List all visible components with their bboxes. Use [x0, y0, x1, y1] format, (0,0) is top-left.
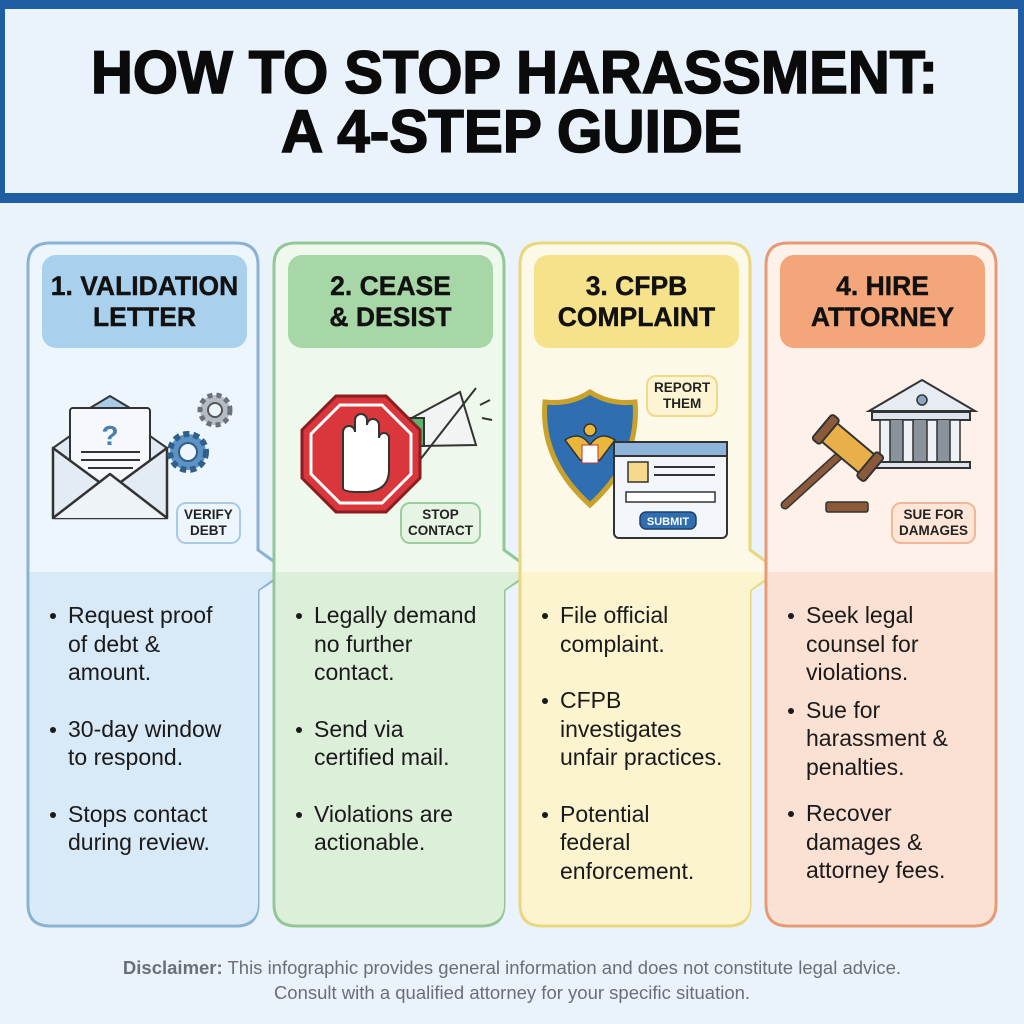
bullets: panel 3: enforcement.: [560, 858, 694, 884]
callout: report them: REPORT: [654, 380, 710, 395]
bullets: panel 2: Legally demand: [314, 602, 476, 628]
bullets: panel 2: no further: [314, 630, 412, 656]
panel 4 heading: ATTORNEY: [811, 302, 954, 332]
callout: stop contact: [400, 502, 481, 544]
panel 2 heading: [288, 255, 493, 348]
bullets: panel 2: actionable.: [314, 829, 425, 855]
bullets: panel 1: Request proof: [68, 602, 212, 628]
callout: verify debt: [176, 502, 241, 544]
title: A 4-STEP GUIDE: [281, 98, 742, 165]
panel 1 heading: LETTER: [93, 302, 196, 332]
panel 4 heading: [780, 255, 985, 348]
callout: sue for damages: SUE FOR: [904, 507, 964, 522]
callout: report them: [646, 375, 718, 417]
callout: stop contact: CONTACT: [408, 523, 473, 538]
disclaimer: Consult with a qualified attorney for your specific situation.: [274, 982, 750, 1003]
panel 4 heading: 4. HIRE: [836, 270, 929, 300]
bullets: panel 2: Violations are: [314, 800, 453, 826]
icon: stop sign with megaphone: [300, 387, 492, 514]
panel 3 heading: [534, 255, 739, 348]
title: [91, 39, 938, 165]
panel 2 heading: 2. CEASE: [330, 270, 451, 300]
bullets: panel 3: complaint.: [560, 630, 665, 656]
callout: sue for damages: DAMAGES: [899, 523, 968, 538]
panel 2 heading: & DESIST: [329, 302, 452, 332]
bullets: panel 4: [788, 602, 948, 883]
bullets: panel 3: federal: [560, 829, 630, 855]
panel 3 heading: COMPLAINT: [558, 302, 715, 332]
bullets: panel 2: certified mail.: [314, 744, 449, 770]
bullets: panel 3: unfair practices.: [560, 744, 722, 770]
callout: verify debt: VERIFY: [184, 507, 233, 522]
bullets: panel 1: of debt &: [68, 630, 160, 656]
bullets: panel 4: penalties.: [806, 754, 904, 780]
bullets: panel 3: investigates: [560, 716, 681, 742]
bullets: panel 1: to respond.: [68, 744, 183, 770]
disclaimer: Disclaimer: This infographic provides general information and does not constitute legal advice.: [123, 957, 901, 978]
bullets: panel 4: Seek legal: [806, 602, 913, 628]
bullets: panel 1: [50, 602, 222, 855]
bullets: panel 4: Recover: [806, 800, 892, 826]
bullets: panel 4: damages &: [806, 828, 922, 854]
bullets: panel 3: [542, 602, 722, 884]
bullets: panel 4: harassment &: [806, 725, 948, 751]
bullets: panel 1: 30-day window: [68, 716, 221, 742]
callout: report them: THEM: [663, 396, 701, 411]
bullets: panel 1: amount.: [68, 659, 151, 685]
icon: shield and web form: SUBMIT: [647, 516, 689, 528]
bullets: panel 1: during review.: [68, 829, 210, 855]
bullets: panel 2: [296, 602, 476, 855]
callout: verify debt: DEBT: [190, 523, 227, 538]
icon: envelope with gears: ?: [101, 420, 119, 451]
icon: envelope with gears: [52, 392, 232, 520]
callout: sue for damages: [891, 502, 976, 544]
bullets: panel 4: attorney fees.: [806, 857, 945, 883]
icon: gavel and courthouse: [780, 378, 978, 513]
bullets: panel 1: Stops contact: [68, 800, 207, 826]
bullets: panel 4: Sue for: [806, 696, 880, 722]
panel 3 heading: 3. CFPB: [586, 270, 687, 300]
bullets: panel 4: violations.: [806, 659, 908, 685]
header banner: [0, 0, 1024, 203]
callout: stop contact: STOP: [422, 507, 459, 522]
title: HOW TO STOP HARASSMENT:: [91, 39, 938, 106]
bullets: panel 3: CFPB: [560, 687, 621, 713]
bullets: panel 2: contact.: [314, 659, 395, 685]
icon: shield and web form: [542, 389, 728, 539]
panel 1 heading: 1. VALIDATION: [51, 270, 238, 300]
disclaimer: [123, 957, 901, 1003]
bullets: panel 4: counsel for: [806, 630, 919, 656]
bullets: panel 3: File official: [560, 602, 668, 628]
panel 1 heading: [42, 255, 247, 348]
bullets: panel 3: Potential: [560, 800, 650, 826]
bullets: panel 2: Send via: [314, 716, 404, 742]
